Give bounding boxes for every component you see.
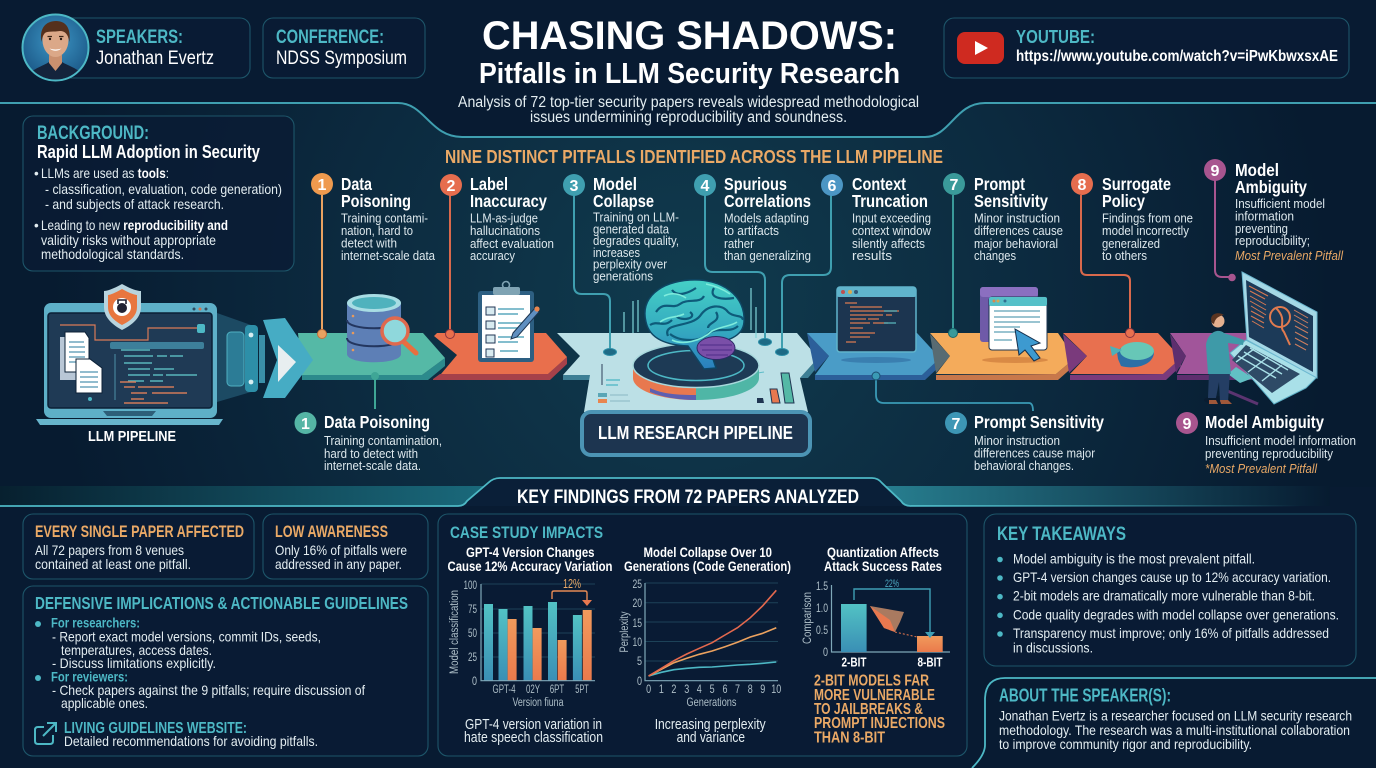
youtube panel [944,18,1349,78]
title: Pitfalls in LLM Security Research [479,58,900,90]
pitfall text: surrogate policy: Findings from one [1102,210,1193,226]
chart heading: GPT-4: GPT-4 Version Changes [466,544,595,560]
line chart: perplexity: 7 [735,682,740,696]
pitfall text: prompt sensitivity: differences cause [974,223,1063,238]
line chart: perplexity: 0 [637,674,642,688]
callout: 2-bit vulnerability: THAN 8-BIT [814,730,885,746]
callout: prompt sensitivity: behavioral changes. [974,458,1074,473]
living guidelines: LIVING GUIDELINES WEBSITE: [64,720,247,737]
header divider line [0,103,1376,137]
connector: pitfall 6 [776,174,843,356]
bar chart: GPT-4 versions: 12% [563,576,581,591]
bar chart: GPT-4 versions: 6PT [550,684,564,696]
bar chart: quantization: 8-BIT [918,655,943,670]
pitfall text: prompt sensitivity [974,174,1063,263]
panel: every single paper affected [23,514,254,579]
label: LLM research pipeline: LLM RESEARCH PIPELINE [598,422,793,443]
panel: background: methodological standards. [41,246,184,262]
line chart: perplexity: 3 [684,682,690,696]
pitfall text: surrogate policy: Policy [1102,191,1145,211]
panel: defensive implications: For researchers: [51,614,140,630]
pitfall text: label inaccuracy: accuracy [470,248,515,263]
pitfall text: context truncation: silently affects [852,236,925,251]
speaker label: SPEAKERS: [96,27,183,48]
pitfall text: label inaccuracy [470,174,554,263]
subtitle [458,94,919,126]
label: LLM research pipeline [582,412,810,455]
panel: defensive implications: - Report exact model versions, commit IDs, seeds, [52,629,321,645]
bar chart: GPT-4 versions: 5PT [575,684,589,696]
panel: defensive implications: temperatures, access dates. [61,642,212,658]
icon: checklist clipboard [478,282,540,362]
pitfall text: model ambiguity: Ambiguity [1235,177,1307,197]
pitfall text: context truncation [852,174,932,263]
arrow stage 5: orange [930,333,1075,380]
speaker name: Jonathan Evertz [96,48,214,69]
bar chart: quantization: 0 [823,645,828,659]
bar chart: quantization: 0.5 [816,623,828,637]
callout: prompt sensitivity: Minor instruction [974,433,1060,448]
line chart: perplexity: Generations [686,695,736,709]
line chart: perplexity: Perplexity [617,612,631,652]
icon: surrogate model [1110,342,1154,367]
pitfall text: surrogate policy: generalized [1102,236,1160,251]
callout: 2-bit vulnerability: 2-BIT MODELS FAR [814,673,929,690]
callout: model ambiguity: 9 [1183,416,1192,433]
line chart: perplexity: 2 [671,682,677,696]
chart heading: GPT-4: Cause 12% Accuracy Variation [448,558,612,574]
panel: defensive implications: applicable ones. [61,695,148,711]
pitfall text: model ambiguity: information [1235,208,1294,224]
chart heading: quantization [824,544,942,574]
pitfall text: prompt sensitivity: Sensitivity [974,191,1048,211]
line chart: perplexity: 8 [748,682,753,696]
connector: pitfall 1 [311,173,333,338]
bar chart: GPT-4 versions: 0 [472,674,477,688]
person [1204,313,1244,404]
speaker panel [22,14,250,84]
pitfall text: data poisoning: detect with [341,236,397,250]
pitfall text: model collapse: generations [593,268,653,284]
callout: data poisoning: Data Poisoning [324,412,430,432]
chart heading: model collapse: Generations (Code Generation) [624,558,791,574]
icon: external link [35,723,56,744]
pipeline background band [0,103,1376,487]
line chart: perplexity: 4 [697,682,702,696]
panel: key takeaways: Model ambiguity is the most prevalent pitfall. [1013,550,1255,566]
pitfall text: spurious correlations [724,174,811,263]
pitfall text: spurious correlations: Correlations [724,191,811,211]
living guidelines [64,720,318,749]
callout: model ambiguity: preventing reproducibility [1205,446,1333,461]
youtube label: YOUTUBE: [1016,27,1095,47]
key findings banner: KEY FINDINGS FROM 72 PAPERS ANALYZED [517,487,859,508]
pitfall text: context truncation: Context [852,174,906,194]
bar chart: quantization: 22% [885,578,899,590]
badge 6 [821,174,843,196]
pitfall text: spurious correlations: than generalizing [724,248,811,263]
panel: about the speaker: to improve community rigor and reproducibility. [999,736,1252,752]
panel: case study impacts: CASE STUDY IMPACTS [450,523,603,542]
line chart: perplexity: 15 [632,616,642,630]
panel: about the speaker: ABOUT THE SPEAKER(S): [999,686,1171,706]
pitfall text: model collapse [593,174,679,284]
panel: background: LLMs are used as tools: [41,165,169,181]
chart heading: GPT-4 [448,544,612,574]
line chart: perplexity: 10 [632,635,642,649]
pitfall text: label inaccuracy: hallucinations [470,223,540,238]
line chart: perplexity: 10 [771,682,782,696]
arrow stage 7: purple [1170,333,1262,380]
pitfall text: surrogate policy: Surrogate [1102,174,1171,194]
pitfall text: surrogate policy: to others [1102,248,1147,263]
pitfall text: model ambiguity: Most Prevalent Pitfall [1235,248,1344,263]
callout: prompt sensitivity: 7 [952,416,961,433]
pitfall text: context truncation: Input exceeding [852,210,931,226]
bar chart: GPT-4 versions [449,576,595,709]
bar chart: GPT-4 versions: 50 [468,626,477,640]
badge 4: 4 [701,178,710,195]
callout: data poisoning: 1 [301,416,310,433]
panel: key takeaways: KEY TAKEAWAYS [997,524,1126,545]
panel: background: • [34,166,39,181]
conference panel: NDSS Symposium [276,48,407,69]
caption: GPT-4 [464,716,603,746]
pitfall text: data poisoning: nation, hard to [341,223,413,238]
bar chart: quantization: 1.5 [816,579,828,593]
pitfall text: label inaccuracy: Inaccuracy [470,191,547,211]
pitfall text: model collapse: perplexity over [593,256,668,272]
pitfall text: context truncation: results [852,248,893,263]
arrow stage 3: central research platform [557,280,818,412]
panel: low awareness: Only 16% of pitfalls were [275,542,407,558]
connector: pitfall 9 [1204,159,1236,281]
holographic disk [633,344,759,400]
line chart: perplexity: 6 [722,682,728,696]
icon: terminal window [837,287,916,352]
pitfall text: surrogate policy [1102,174,1193,263]
connector: pitfall 2 [440,174,462,338]
pitfall text: model ambiguity: preventing [1235,221,1288,236]
callout: model ambiguity: Model Ambiguity [1205,412,1324,432]
bar chart: quantization [800,578,950,670]
panel: defensive implications: - Check papers against the 9 pitfalls; require discussion of [52,682,365,698]
pitfall text: surrogate policy: model incorrectly [1102,223,1189,238]
callout: data poisoning: Training contamination, [324,433,442,448]
title: CHASING SHADOWS: [482,14,897,58]
pitfall text: model collapse: Collapse [593,191,654,211]
callout: prompt sensitivity [872,372,1104,473]
chart heading: quantization: Quantization Affects [827,544,939,560]
conference panel: CONFERENCE: [276,27,384,48]
callout: data poisoning: internet-scale data. [324,458,421,473]
pitfall text: prompt sensitivity: changes [974,248,1016,263]
caption: GPT-4: hate speech classification [464,729,603,746]
bar chart: GPT-4 versions: 02Y [526,684,540,696]
panel: defensive implications: For reviewers: [51,668,128,684]
beams [624,288,756,338]
panel: background [23,116,294,271]
bar chart: GPT-4 versions: Model classification [449,590,461,674]
pitfall text: model ambiguity: reproducibility; [1235,233,1310,248]
connector: pitfall 4 [694,174,772,346]
line chart: perplexity: 5 [710,682,715,696]
caption: model collapse [655,716,766,746]
pitfall text: model ambiguity: Insufficient model [1235,196,1325,211]
line chart: perplexity [617,577,782,709]
panel: key takeaways [984,514,1356,666]
pitfall text: prompt sensitivity: Minor instruction [974,210,1060,226]
pitfall text: model collapse: degrades quality, [593,233,679,248]
pitfall text: spurious correlations: Spurious [724,174,787,194]
icon: brain [645,280,744,369]
bar chart: quantization: 2-BIT [842,655,867,670]
bar chart: quantization: Comparison [800,592,814,644]
chart heading: quantization: Attack Success Rates [824,558,942,574]
pitfall text: model collapse: increases [593,245,640,260]
badge 6: 6 [828,178,837,195]
bar chart: GPT-4 versions: GPT-4 [492,684,516,696]
badge 1 [311,173,333,195]
line chart: perplexity: 9 [760,682,766,696]
panel: background: BACKGROUND: [37,123,149,144]
callout: 2-bit vulnerability: MORE VULNERABLE [814,687,935,704]
connector: pitfall 8 [1071,173,1134,338]
panel: background: • [34,218,39,233]
panel: defensive implications: - Discuss limitations explicitly. [52,655,216,671]
callout: 2-bit vulnerability [814,673,945,746]
callout: 2-bit vulnerability: PROMPT INJECTIONS [814,715,945,732]
badge 4 [694,174,716,196]
badge 7 [943,173,965,195]
panel: background: - and subjects of attack research. [45,196,224,212]
badge 2: 2 [447,178,456,195]
label: LLM pipeline: LLM PIPELINE [88,428,176,445]
line chart: perplexity: 20 [632,596,642,610]
bar chart: GPT-4 versions: 75 [468,602,477,616]
callout: data poisoning: hard to detect with [324,446,418,461]
panel: every single paper affected: EVERY SINGLE PAPER AFFECTED [35,523,244,541]
panel: background: Rapid LLM Adoption in Security [37,142,260,162]
panel: low awareness: addressed in any paper. [275,556,402,572]
youtube url: https://www.youtube.com/watch?v=iPwKbwxsxAE [1016,48,1338,65]
pitfall text: spurious correlations: Models adapting [724,210,809,226]
panel: key takeaways: Transparency must improve; only 16% of pitfalls addressed [1013,625,1329,641]
funnel arrow head [263,318,313,398]
caption: model collapse: Increasing perplexity [655,716,766,733]
subtitle: Analysis of 72 top-tier security papers reveals widespread methodological [458,94,919,111]
key findings banner [0,478,1330,508]
callout: 2-bit vulnerability: TO JAILBREAKS & [814,701,923,718]
arrow stage 4: blue [807,333,940,380]
pitfall text: prompt sensitivity: Prompt [974,174,1025,194]
panel: key takeaways: in discussions. [1013,639,1093,655]
chart heading: model collapse: Model Collapse Over 10 [644,544,772,560]
pitfall text: data poisoning: Data [341,174,372,194]
subtitle: issues undermining reproducibility and soundness. [530,109,847,126]
pitfall text: data poisoning [341,174,436,263]
badge 3 [563,174,585,196]
icon: database [347,294,416,362]
pitfall text: data poisoning: Training contami- [341,210,428,226]
pitfall text: spurious correlations: rather [724,236,755,251]
panel: every single paper affected: contained at least one pitfall. [35,556,191,572]
badge 2 [440,174,462,196]
badge 8: 8 [1078,177,1087,194]
connector: pitfall 3 [563,174,616,356]
bar chart: GPT-4 versions: 100 [464,578,477,592]
bar chart: quantization: 1.0 [816,601,828,615]
bar chart: GPT-4 versions: Version fiuna [512,697,564,709]
pitfall text: label inaccuracy: LLM-as-judge [470,210,538,226]
panel: about the speaker [972,678,1376,768]
panel: every single paper affected: All 72 papers from 8 venues [35,542,184,558]
pitfall text: data poisoning: internet-scale data [341,248,436,263]
line chart: perplexity: 5 [637,654,642,668]
panel: defensive implications: DEFENSIVE IMPLICATIONS & ACTIONABLE GUIDELINES [35,593,408,613]
arrow stage 1: teal [298,333,445,380]
pitfall text: spurious correlations: to artifacts [724,223,779,238]
panel: low awareness [263,514,428,579]
callout: data poisoning [294,372,442,473]
panel: background: validity risks without appropriate [41,232,216,248]
panel: background: - classification, evaluation, code generation) [45,181,282,197]
caption: GPT-4: GPT-4 version variation in [465,716,602,733]
badge 8 [1071,173,1093,195]
line chart: perplexity: 25 [632,577,642,591]
caption: model collapse: and variance [677,729,745,746]
arrow stage 2: red [433,333,567,380]
icon: youtube [957,32,1004,64]
panel: defensive implications [23,586,428,756]
pitfall text: context truncation: context window [852,223,932,238]
pitfall text: data poisoning: Poisoning [341,191,411,211]
callout: model ambiguity [1176,412,1356,476]
conference panel [263,18,425,78]
pitfall text: model ambiguity: Model [1235,160,1279,180]
panel: case study impacts [438,514,967,756]
line chart: perplexity: 0 [646,682,651,696]
callout: prompt sensitivity: differences cause major [974,446,1096,460]
badge 7: 7 [950,177,959,194]
small tool markers [598,364,794,403]
badge 3: 3 [570,178,579,195]
pipeline icon: source laptop [36,284,251,425]
panel: background: Leading to new reproducibility and [41,217,228,233]
pitfall text: model ambiguity [1235,160,1344,263]
pitfall text: context truncation: Truncation [852,191,928,211]
heading: nine pitfalls: NINE DISTINCT PITFALLS IDENTIFIED ACROSS THE LLM PIPELINE [445,146,943,167]
icon: prompt windows and cursor [980,287,1047,361]
living guidelines: Detailed recommendations for avoiding pitfalls. [64,733,318,749]
pitfall text: label inaccuracy: Label [470,174,508,194]
panel: low awareness: LOW AWARENESS [275,523,388,541]
title [479,14,900,90]
speaker photo [22,14,89,84]
pitfall text: model collapse: Model [593,174,637,194]
pipeline icon: funnel connector [227,325,265,392]
panel: key takeaways: 2-bit models are dramatically more vulnerable than 8-bit. [1013,588,1315,604]
bar chart: GPT-4 versions: 25 [468,650,477,664]
connector: pitfall 7 [943,173,965,338]
chart heading: model collapse [624,544,791,574]
arrow stage 6: surrogate red [1063,333,1181,380]
line chart: perplexity: 1 [659,682,664,696]
pitfall text: model collapse: Training on LLM- [593,210,679,224]
icon: laptop and person [1204,272,1317,404]
badge 1: 1 [318,177,327,194]
callout: model ambiguity: *Most Prevalent Pitfall [1205,461,1318,476]
badge 9: 9 [1211,163,1220,180]
pitfall text: prompt sensitivity: major behavioral [974,236,1058,251]
pitfall text: label inaccuracy: affect evaluation [470,236,554,251]
pitfall text: model collapse: generated data [593,222,670,236]
callout: model ambiguity: Insufficient model information [1205,433,1356,448]
callout: prompt sensitivity: Prompt Sensitivity [974,412,1104,432]
